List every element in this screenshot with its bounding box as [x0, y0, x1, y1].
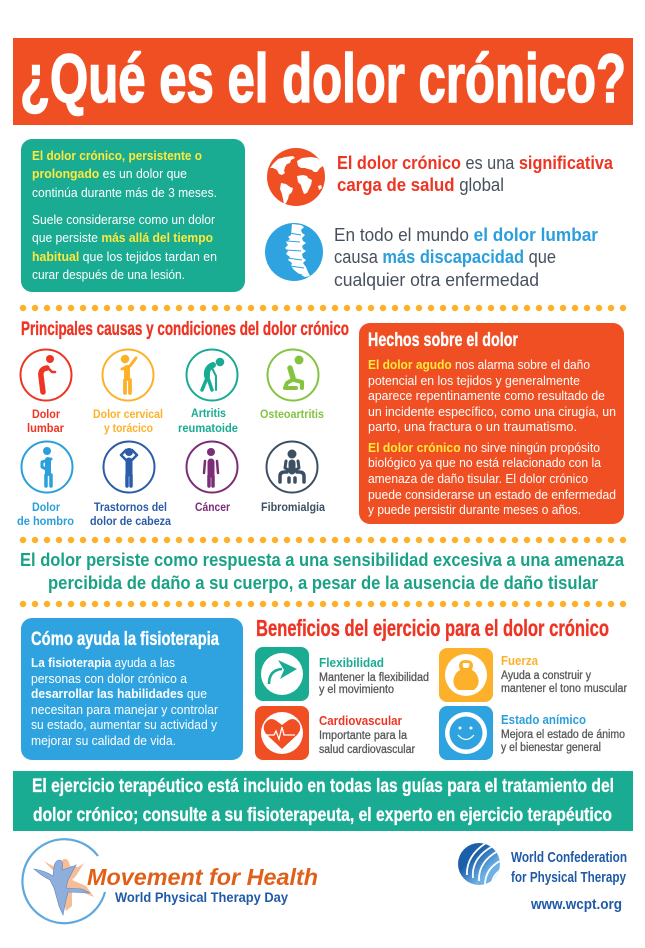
icon: globe	[267, 148, 325, 206]
panel: facts: amenaza de daño tisular. El dolor crónico	[368, 471, 588, 486]
label: Osteoartritis	[260, 407, 324, 421]
label: Fibromialgia	[261, 500, 325, 514]
panel: facts: El dolor crónico no sirve ningún propósito	[368, 440, 600, 455]
icon: osteoarthritis	[268, 350, 318, 400]
panel: facts: parto, una fractura o un traumatismo.	[368, 419, 577, 434]
panel: definition: curar después de una lesión.	[32, 267, 185, 282]
label: Trastornos del	[94, 500, 167, 514]
benefit: flexibility: Flexibilidad	[319, 655, 384, 670]
panel: facts: biológico ya que no está relacionado con la	[368, 455, 602, 470]
label: Artritis	[191, 406, 226, 420]
label	[178, 406, 238, 435]
panel: definition: prolongado es un dolor que	[32, 166, 187, 181]
text: global burden: El dolor crónico es una significativa	[337, 153, 614, 173]
icon: neck and thoracic pain	[102, 350, 154, 400]
panel: facts: y puede persistir durante meses o años.	[368, 502, 581, 517]
panel: facts: aparece repentinamente como resultado de	[368, 388, 605, 403]
benefit: cardiovascular	[255, 706, 415, 760]
text: low back pain: cualquier otra enfermedad	[334, 270, 539, 290]
panel: facts	[359, 323, 624, 524]
panel: physiotherapy: La fisioterapia ayuda a las	[31, 655, 175, 670]
icon: rheumatoid arthritis	[186, 350, 238, 400]
icon: cancer	[186, 442, 238, 492]
panel: definition: que persiste más allá del tiempo	[32, 230, 213, 245]
benefit: flexibility: y el movimiento	[319, 684, 394, 696]
logo: Movement for Health	[22, 839, 318, 923]
label: Dolor cervical	[93, 407, 163, 421]
benefit: cardiovascular: salud cardiovascular	[319, 744, 415, 756]
text: global burden: carga de salud global	[337, 175, 504, 195]
benefit: strength: Fuerza	[501, 653, 539, 668]
icon: headache	[104, 442, 154, 492]
heading: causes: Principales causas y condiciones del dolor crónico	[21, 318, 349, 340]
panel: facts: Hechos sobre el dolor	[368, 330, 518, 351]
label	[17, 500, 74, 528]
benefit: mood: Estado anímico	[501, 712, 586, 727]
benefit: mood: y el bienestar general	[501, 742, 601, 754]
panel: physiotherapy: mejorar su calidad de vida.	[31, 733, 176, 748]
panel: facts: puede considerarse un estado de enfermedad	[368, 487, 616, 502]
benefit: cardiovascular: Importante para la	[319, 730, 408, 742]
benefit: flexibility: Mantener la flexibilidad	[319, 672, 429, 684]
call to action band	[13, 771, 633, 831]
text: low back pain: causa más discapacidad que	[334, 247, 556, 267]
logo: WCPT: www.wcpt.org	[530, 896, 622, 913]
label: de hombro	[17, 514, 74, 528]
icon: shoulder pain	[22, 442, 72, 492]
panel: facts: El dolor agudo nos alarma sobre el daño	[368, 357, 590, 372]
label: Cáncer	[195, 500, 230, 514]
benefit: mood: Mejora el estado de ánimo	[501, 729, 625, 741]
label: Dolor	[32, 500, 60, 514]
benefit: strength	[439, 648, 627, 702]
text: low back pain: En todo el mundo el dolor lumbar	[334, 225, 598, 245]
panel: physiotherapy: desarrollar las habilidades que	[31, 686, 207, 701]
logo: WCPT	[458, 843, 627, 913]
panel: physiotherapy: personas con dolor crónico a	[31, 671, 188, 686]
text: global burden	[337, 153, 614, 195]
icon: lumbar pain	[20, 350, 72, 400]
panel: definition: Suele considerarse como un dolor	[32, 212, 216, 227]
label	[27, 407, 64, 435]
panel: physiotherapy: Cómo ayuda la fisioterapia	[31, 629, 219, 650]
benefit: strength: mantener el tono muscular	[501, 683, 627, 695]
icon: spine	[265, 223, 323, 281]
benefit: mood	[439, 706, 625, 760]
panel: physiotherapy: necesitan para manejar y controlar	[31, 702, 219, 717]
label: reumatoide	[178, 421, 238, 435]
label: dolor de cabeza	[90, 514, 171, 528]
benefit: flexibility	[255, 647, 429, 701]
label: y torácico	[104, 421, 153, 435]
benefit: strength: Ayuda a construir y	[501, 670, 591, 682]
panel: facts: un incidente específico, como una cirugía, un	[368, 404, 616, 419]
label	[90, 500, 171, 528]
panel: definition: habitual que los tejidos tardan en	[32, 249, 217, 264]
label: lumbar	[27, 421, 64, 435]
panel: definition: continúa durante más de 3 meses.	[32, 185, 217, 200]
icon: fibromyalgia	[266, 442, 318, 492]
text: low back pain	[334, 225, 598, 290]
panel: physiotherapy: su estado, aumentar su actividad y	[31, 717, 217, 732]
statement: percibida de daño a su cuerpo, a pesar de la ausencia de daño tisular	[48, 573, 598, 593]
logo: Movement for Health: World Physical Therapy Day	[115, 890, 288, 905]
label: Dolor	[32, 407, 60, 421]
panel: causes icons	[17, 350, 325, 528]
statement	[20, 550, 625, 593]
benefit: cardiovascular: Cardiovascular	[319, 713, 402, 728]
panel: definition: El dolor crónico, persistente o	[32, 148, 202, 163]
logo: Movement for Health: Movement for Health	[87, 864, 318, 890]
label	[93, 407, 163, 435]
panel: facts: potencial en los tejidos y generalmente	[368, 373, 580, 388]
panel: physiotherapy	[21, 618, 243, 760]
panel: definition	[21, 139, 245, 292]
